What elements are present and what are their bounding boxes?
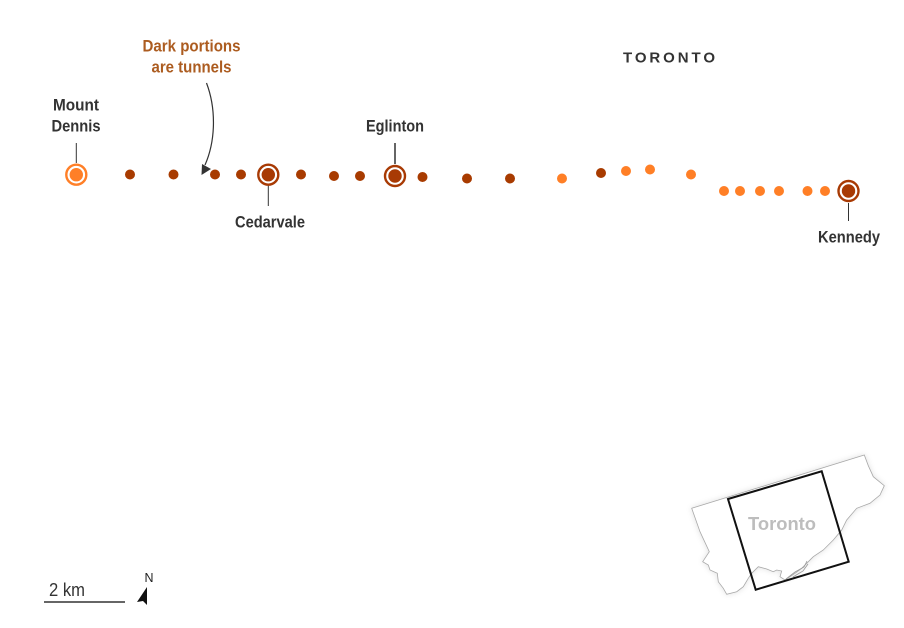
station: Eglinton (366, 118, 424, 186)
scale bar: 2 km: 2 km (49, 580, 85, 600)
north arrow: N (144, 571, 154, 585)
station: Eglinton: Eglinton (366, 118, 424, 136)
scale bar: 2 km (44, 580, 125, 602)
station: Cedarvale (235, 165, 305, 232)
extent rectangle (728, 471, 849, 590)
harbour islands detail (786, 561, 808, 579)
callout: dark portions are tunnels: Dark portions (142, 38, 240, 56)
callout: dark portions are tunnels: are tunnels (152, 58, 232, 76)
callout: dark portions are tunnels (142, 38, 240, 76)
north arrow (137, 571, 154, 605)
station: Mount Dennis (52, 96, 100, 185)
station line: stops (125, 164, 830, 196)
title: Toronto: TORONTO (623, 50, 715, 66)
station: Cedarvale: Cedarvale (235, 214, 305, 232)
city outline (692, 455, 884, 594)
locator label: Toronto (748, 514, 816, 534)
station: Kennedy: Kennedy (818, 228, 881, 246)
locator map: Toronto (692, 455, 884, 594)
station: Mount Dennis: Mount (53, 96, 99, 114)
station: Kennedy (818, 181, 881, 246)
station: Mount Dennis: Dennis (52, 118, 100, 136)
arrow: callout pointer (202, 83, 213, 175)
